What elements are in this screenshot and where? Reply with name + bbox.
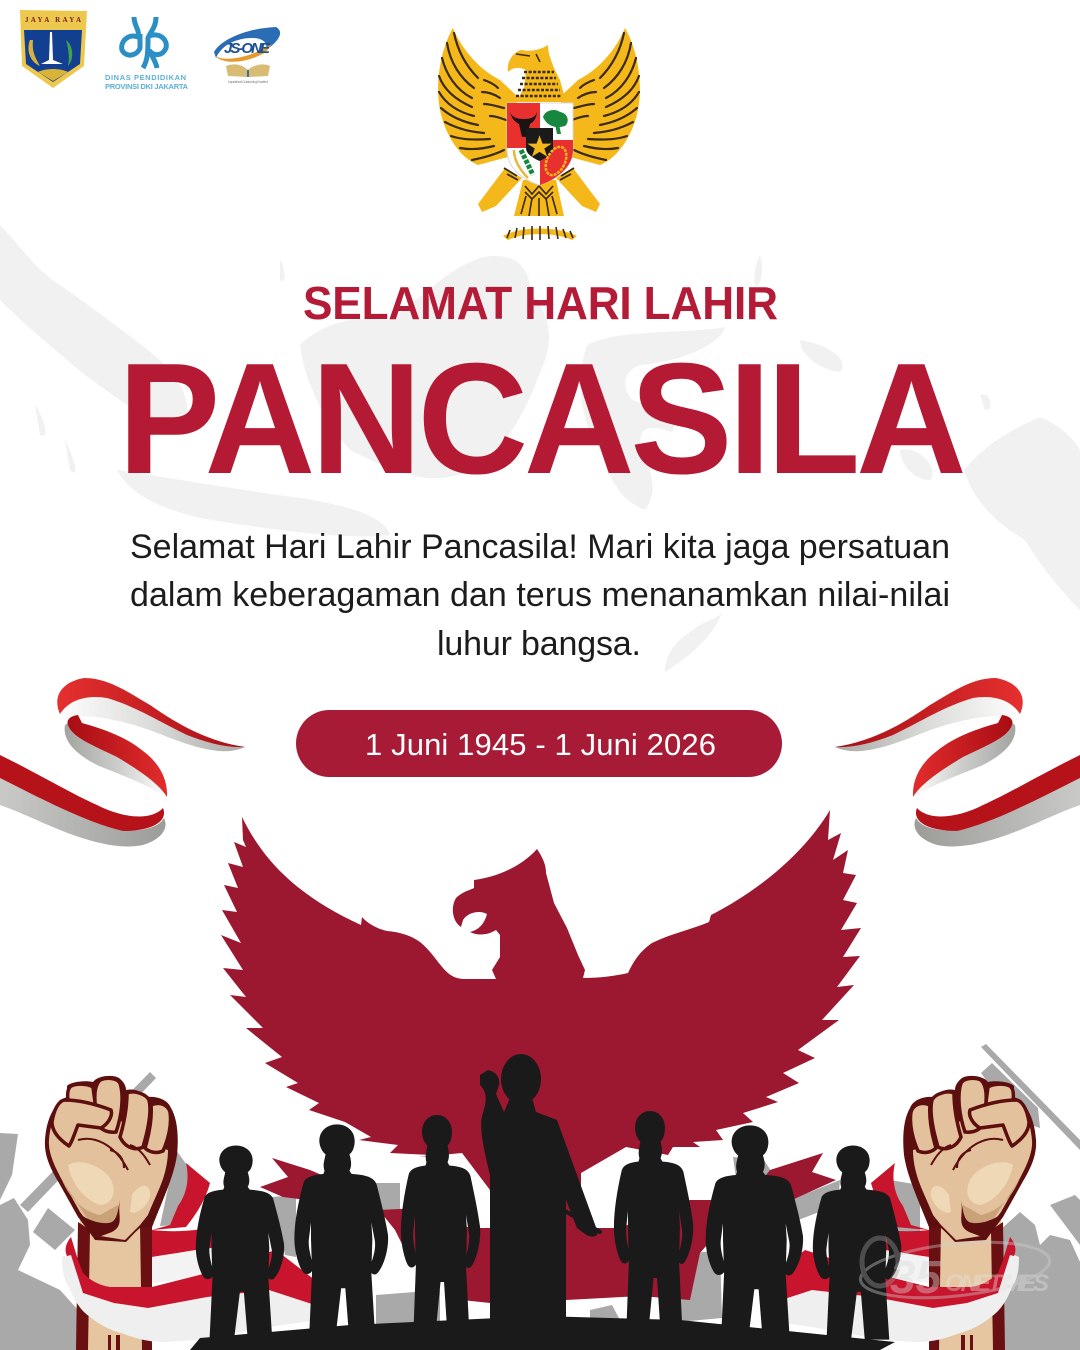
logo text: DINAS PENDIDIKAN: [105, 73, 186, 82]
watermark: 35: [890, 1251, 943, 1303]
rice: [514, 150, 528, 178]
figure 1: [196, 1146, 284, 1340]
figure 5: [614, 1111, 693, 1333]
grey crowd: right: [272, 1044, 1080, 1350]
ribbon: left: [0, 678, 245, 847]
silhouette: left tail tip: [260, 1158, 345, 1205]
banyan tree: [543, 110, 568, 127]
fist: left: [45, 1076, 320, 1350]
silhouette: wings, head and body: [221, 810, 861, 1228]
body text: dalam keberagaman dan terus menanamkan nilai-nilai: [130, 576, 950, 614]
silhouette figures: [196, 1054, 901, 1343]
figure 7: [813, 1146, 901, 1340]
figure 6: [706, 1125, 803, 1343]
logo: JS-ONE: Inspirational Outstanding Excellent: [228, 80, 268, 84]
eagle silhouette: [221, 810, 861, 1303]
watermark: ONETIMES: [945, 1270, 1049, 1297]
grey crowd: left: [0, 1072, 192, 1350]
emblem: head and neck: [508, 45, 566, 102]
silhouette: right tail tip: [750, 1153, 836, 1200]
background map of Indonesia: [0, 225, 1080, 672]
ground platform: [190, 1316, 895, 1350]
emblem: tail: [514, 180, 564, 216]
map: Sumatra: [0, 225, 187, 425]
emblem: legs and talons: [478, 168, 522, 212]
fist: right: [761, 1076, 1036, 1350]
body text: [130, 528, 950, 663]
icon: Garuda Pancasila emblem: [438, 28, 640, 240]
logo: Jaya Raya shield: [20, 10, 87, 88]
logo: Dinas Pendidikan: [105, 17, 189, 91]
star: [527, 135, 552, 157]
emblem: motto banner rays: [503, 228, 577, 240]
logo label: JAYA RAYA: JAYA RAYA: [25, 16, 81, 24]
body text: Selamat Hari Lahir Pancasila! Mari kita jaga persatuan: [130, 528, 950, 566]
figure: central leader: [480, 1054, 600, 1330]
chain: [521, 150, 533, 175]
emblem: right wing: [560, 28, 640, 165]
logo: Dinas Pendidikan: PROVINSI DKI JAKARTA: [105, 82, 189, 91]
bull head: [510, 112, 537, 137]
centre black shield: [526, 128, 553, 161]
heading: SELAMAT HARI LAHIR: SELAMAT HARI LAHIR: [303, 277, 778, 329]
watermark: [858, 1234, 1052, 1306]
map: Sulawesi: [581, 327, 725, 510]
date pill: [296, 710, 782, 777]
emblem: left wing: [438, 28, 518, 165]
title: PANCASILA: PANCASILA: [118, 330, 967, 506]
date pill: 1 Juni 1945 - 1 Juni 2026: [365, 727, 716, 762]
figure 2: [294, 1124, 388, 1342]
body text: luhur bangsa.: [437, 625, 641, 663]
cotton ring: [542, 144, 570, 178]
map: Papua: [964, 417, 1080, 610]
ribbon: right: [835, 678, 1080, 847]
map: Maluku and small islands: [35, 255, 990, 672]
silhouette: tail: [379, 1200, 720, 1303]
logo: JS-ONE: [214, 27, 280, 84]
map: Java: [117, 470, 390, 536]
logo: JS-ONE: JS-ONE: [224, 40, 271, 57]
map: Kalimantan: [300, 256, 549, 478]
figure 3: [401, 1115, 480, 1337]
emblem: shield: [507, 103, 573, 185]
